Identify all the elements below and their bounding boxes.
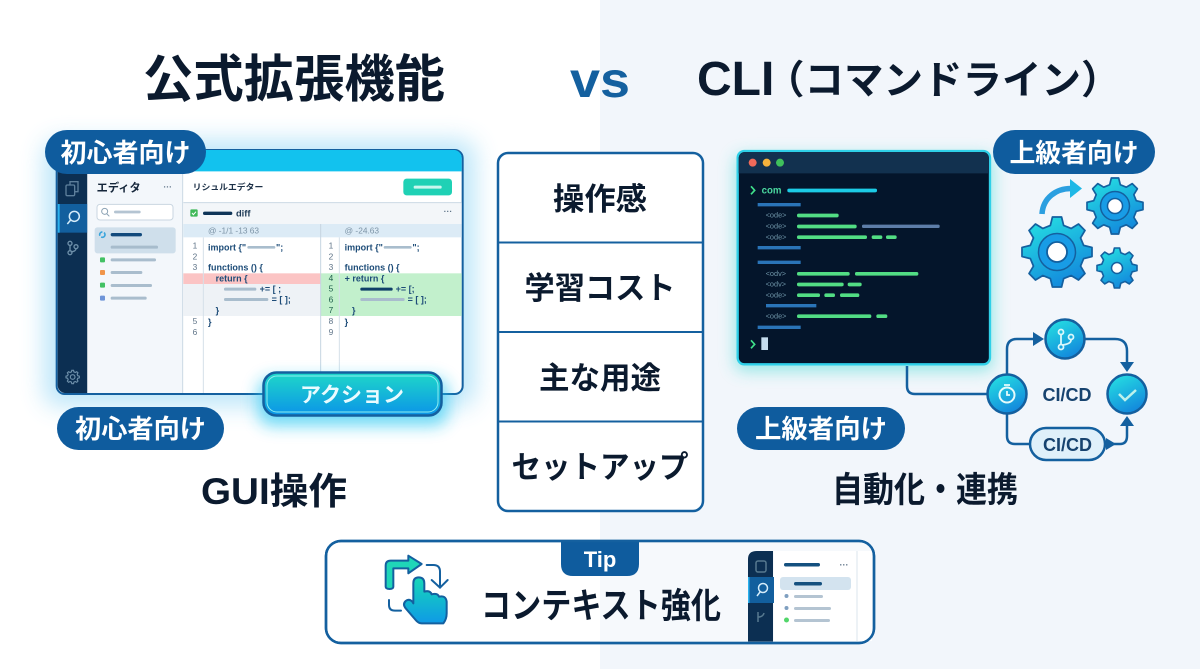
diff right code: 8: [329, 316, 334, 326]
title: CLI: [697, 53, 1120, 106]
gear large: [1022, 217, 1092, 287]
icon: branch: [68, 241, 78, 255]
gear small: [1097, 248, 1137, 288]
arrow: rotation: [1042, 179, 1082, 214]
diff right code: 4: [329, 273, 334, 283]
diff right code: = [ ];: [408, 295, 427, 305]
mini sidebar: ···: [840, 560, 848, 570]
diff left code: 2: [193, 252, 198, 262]
badge: advanced bottom: [737, 407, 905, 450]
diff right code: 3: [329, 262, 334, 272]
diff left code: }: [216, 305, 220, 315]
code lines: [758, 205, 940, 327]
tab: Tip: Tip: [584, 547, 616, 572]
code lines: <odv>: [766, 280, 786, 289]
badge: advanced bottom: 上級者向け: [755, 414, 887, 444]
explorer panel: エディタ: [97, 180, 141, 194]
panel: tip: [326, 541, 874, 643]
diff right code: import {": [345, 242, 383, 252]
diff header: @ -24.63: [345, 225, 379, 235]
badge: beginner bottom: 初心者向け: [75, 414, 206, 444]
label: GUI: GUI操作: [201, 471, 347, 512]
diff left code: 5: [193, 316, 198, 326]
gear medium: [1087, 178, 1143, 234]
diff right code: [329, 241, 427, 337]
badge: advanced top: 上級者向け: [1010, 138, 1138, 168]
code lines: <ode>: [766, 311, 786, 320]
diff header: リシュルエデター: [193, 182, 263, 192]
panel: comparison table: [498, 153, 703, 511]
diff header: diff: [236, 208, 251, 218]
diff left code: return {: [216, 273, 248, 283]
row: main use: 主な用途: [539, 361, 661, 396]
code lines: <ode>: [766, 211, 786, 220]
title: CLI: CLI: [697, 53, 774, 106]
diff highlights: [183, 224, 462, 393]
diff right code: }: [345, 317, 349, 327]
row: setup: セットアップ: [512, 450, 688, 485]
diff left code: functions () {: [208, 263, 263, 273]
diff left code: [193, 241, 291, 337]
pill: CI/CD: [1030, 428, 1105, 460]
diff header: @ -1/1 -13 63: [208, 225, 259, 235]
node: check: [1108, 374, 1146, 414]
title: vs: vs: [570, 52, 630, 108]
title: official extension: 公式拡張機能: [143, 51, 445, 108]
diff right code: 6: [329, 294, 334, 304]
diff left code: 1: [193, 241, 198, 251]
code lines: <ode>: [766, 232, 786, 241]
pill: CI/CD: CI/CD: [1043, 435, 1092, 455]
button: action: [258, 372, 448, 426]
prompt line: com: [762, 185, 782, 196]
diff right code: 2: [329, 252, 334, 262]
diff left code: }: [208, 317, 212, 327]
arrowheads: [1033, 332, 1134, 450]
row: learning cost: 学習コスト: [524, 271, 676, 306]
row: operation feel: 操作感: [553, 182, 647, 217]
explorer panel: [87, 171, 183, 393]
icon: settings: [66, 370, 79, 384]
tab: Tip: [561, 541, 639, 576]
connector lines: [907, 339, 1127, 444]
explorer panel: ···: [163, 181, 172, 191]
icon: tap hand: [386, 556, 448, 623]
diff right code: }: [352, 305, 356, 315]
diff right code: 5: [329, 284, 334, 294]
diff left code: ";: [276, 242, 283, 252]
badge: advanced top: [993, 130, 1155, 174]
diff header: [183, 179, 462, 237]
prompt line: [751, 185, 877, 196]
text: context: コンテキスト強化: [481, 587, 721, 626]
label: automation: 自動化・連携: [832, 471, 1018, 510]
panel: GUI editor window: [44, 140, 475, 406]
diff left code: += [ ;: [260, 284, 281, 294]
node: timer: [988, 374, 1026, 414]
diff left code: 3: [193, 262, 198, 272]
badge: beginner top: [45, 130, 206, 174]
diff header: ···: [444, 206, 452, 216]
icon: gears: [1022, 178, 1143, 288]
icon: search: [67, 211, 79, 224]
diff right code: ";: [412, 242, 420, 252]
diff right code: 1: [329, 241, 334, 251]
badge: beginner bottom: [57, 407, 224, 450]
panel: terminal window: [735, 151, 993, 371]
diff right code: 7: [329, 305, 334, 315]
diff right code: 9: [329, 327, 334, 337]
cursor: [751, 337, 768, 350]
icon: files: [66, 182, 78, 196]
button: action: アクション: [300, 384, 404, 407]
diff left code: import {": [208, 242, 246, 252]
code lines: <ode>: [766, 290, 786, 299]
label: CI/CD: CI/CD: [1042, 385, 1092, 405]
code lines: <ode>: [766, 222, 786, 231]
title: CLI: （コマンドライン）: [765, 59, 1120, 103]
diff right code: functions () {: [345, 263, 400, 273]
diff left code: 6: [193, 327, 198, 337]
code lines: <odv>: [766, 269, 786, 278]
diff right code: + return {: [345, 273, 385, 283]
diff left code: = [ ];: [272, 295, 291, 305]
node: branch: [1046, 320, 1084, 358]
diagram: CI/CD loop: [907, 320, 1146, 460]
badge: beginner top: 初心者向け: [60, 138, 190, 168]
diff right code: += [;: [396, 284, 415, 294]
mini sidebar: [748, 551, 872, 642]
